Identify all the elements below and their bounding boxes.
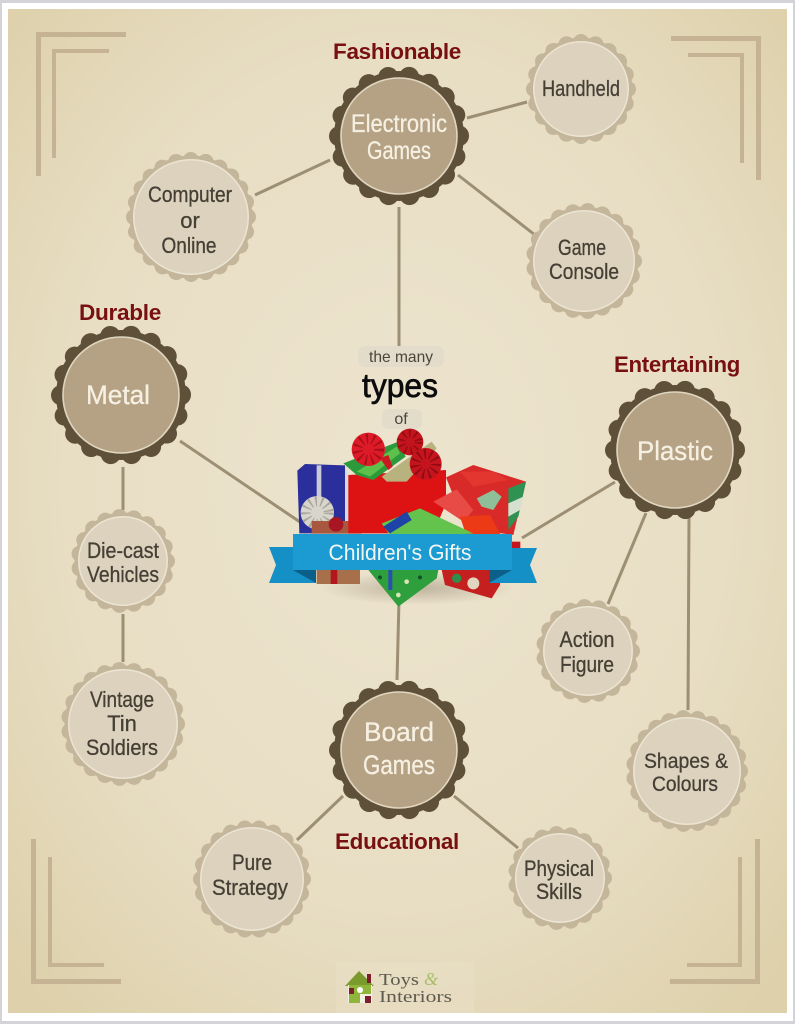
badge: Vintage Tin Soldiers: Tin — [107, 711, 137, 736]
banner: Children's Gifts: Children's Gifts — [328, 540, 472, 565]
badge: Action Figure: Figure — [560, 652, 614, 677]
badge: Board Games: Games — [363, 750, 435, 780]
heading: the many types of: types — [362, 367, 438, 404]
badge: Die-cast Vehicles: Die-cast — [87, 538, 159, 563]
connector lines — [123, 102, 689, 848]
corner bracket: top right — [671, 36, 761, 180]
badge: Computer or Online: Computer — [148, 182, 232, 207]
category label: Fashionable: Fashionable — [333, 39, 461, 64]
badge: Die-cast Vehicles — [74, 512, 172, 610]
badge: Shapes & Colours — [630, 714, 744, 828]
badge: Action Figure: Action — [560, 627, 614, 652]
category label: Durable: Durable — [79, 300, 161, 325]
heading: the many types of: the many — [369, 349, 433, 366]
badge: Electronic Games — [334, 71, 464, 201]
badge: Pure Strategy: Pure — [232, 850, 272, 875]
badge: Game Console: Game — [558, 235, 606, 260]
corner bracket: top left — [36, 32, 126, 176]
logo: Toys & Interiors: Toys — [379, 970, 419, 989]
badge: Shapes & Colours: Shapes & — [644, 750, 728, 773]
badge: Physical Skills: Skills — [536, 879, 582, 904]
category label: Entertaining: Entertaining — [614, 352, 740, 377]
logo: Toys & Interiors — [336, 962, 474, 1013]
badge: Physical Skills: Physical — [524, 856, 594, 881]
badge: Vintage Tin Soldiers: Soldiers — [86, 735, 158, 760]
badge: Board Games — [334, 685, 464, 815]
badge: Computer or Online: Online — [162, 233, 216, 258]
logo: Toys & Interiors: Interiors — [379, 987, 452, 1006]
badge: Electronic Games: Electronic — [351, 110, 447, 138]
icon: puzzle house — [345, 971, 374, 1003]
heading: the many types of — [358, 346, 444, 429]
badge: Game Console: Console — [549, 259, 619, 284]
badge: Pure Strategy — [196, 824, 308, 934]
badge: Electronic Games: Games — [367, 137, 431, 165]
badge: Shapes & Colours: Colours — [652, 773, 718, 796]
badge: Computer or Online: or — [180, 208, 200, 233]
logo: Toys & Interiors: & — [424, 969, 438, 989]
heading: the many types of: of — [394, 411, 408, 428]
badge: Pure Strategy: Strategy — [212, 875, 288, 900]
badge: Game Console — [530, 206, 638, 316]
illustration: pile of wrapped gifts — [297, 429, 526, 607]
category label: Educational: Educational — [335, 829, 459, 854]
badge: Plastic — [610, 385, 740, 515]
badge: Die-cast Vehicles: Vehicles — [87, 562, 159, 587]
badge: Vintage Tin Soldiers — [64, 666, 182, 782]
corner bracket: bottom left — [31, 839, 121, 984]
corner bracket: bottom right — [670, 839, 760, 984]
banner: Children's Gifts — [269, 534, 537, 583]
badge: Action Figure — [540, 602, 636, 700]
badge: Vintage Tin Soldiers: Vintage — [90, 687, 154, 712]
badge: Metal: Metal — [86, 380, 150, 410]
badge: Plastic: Plastic — [637, 436, 713, 466]
badge: Metal — [56, 330, 186, 460]
badge: Handheld — [530, 38, 632, 140]
badge: Physical Skills — [512, 830, 608, 926]
badge: Computer or Online — [130, 156, 252, 278]
badge: Board Games: Board — [364, 717, 434, 747]
badge: Handheld: Handheld — [542, 76, 620, 101]
